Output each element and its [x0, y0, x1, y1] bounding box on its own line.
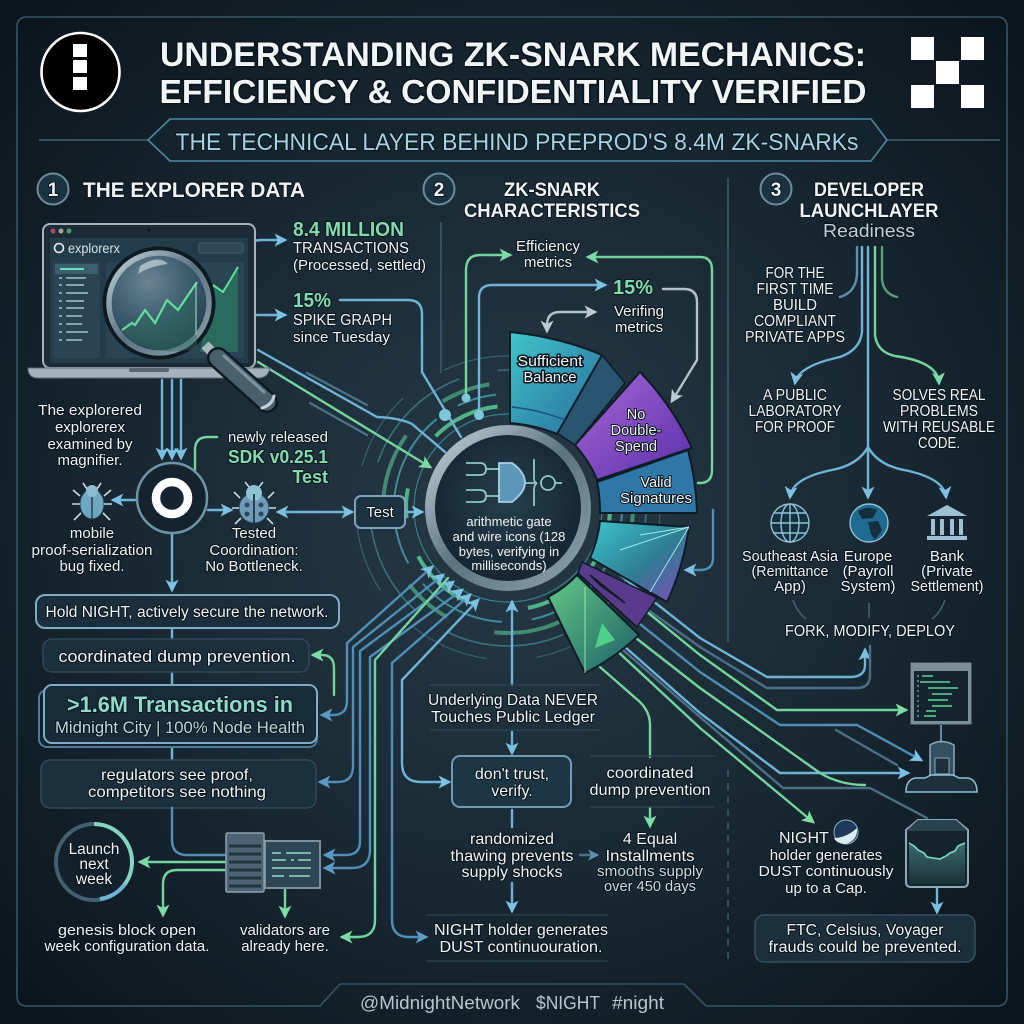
- icon: moon: [834, 820, 858, 844]
- efficiency and verifying arrows: [439, 255, 712, 483]
- panel: regulators: [41, 760, 316, 808]
- text: night holder dust: NIGHT: [779, 830, 829, 847]
- core circle with gate: and wire icons (128: [453, 529, 565, 544]
- logo: right checker: [911, 37, 984, 108]
- stat: 15% spike: since Tuesday: [293, 329, 391, 346]
- stat: 8.4 million: [293, 219, 426, 274]
- stat: 15% spike: [293, 290, 392, 346]
- wedge: sufficient balance: [510, 332, 602, 434]
- text: randomized thawing: [450, 831, 574, 881]
- heading: section 3: DEVELOPER: [814, 180, 924, 201]
- text: validators: [240, 922, 330, 955]
- heading: section 1: [38, 174, 305, 204]
- text: southeast asia: (Remittance: [752, 563, 828, 580]
- panel: coordinated dump prevention: [43, 639, 309, 672]
- text: equal installments: [597, 831, 704, 895]
- concentric rings around core: [356, 356, 660, 660]
- text: SDK note: Test: [292, 467, 328, 487]
- text: europe: (Payroll: [843, 563, 893, 580]
- text: efficiency metrics: metrics: [524, 254, 572, 271]
- flow arrows around ring logo: [113, 500, 422, 590]
- wedge: no double-spend: Double-: [611, 423, 662, 439]
- text: magnifier note: The explorered: [38, 402, 142, 419]
- callout: frauds: frauds could be prevented.: [768, 939, 962, 956]
- text: solves real problems: [883, 387, 995, 452]
- icon: wire globe: [771, 504, 809, 542]
- connector bundle to left panels: [313, 567, 478, 937]
- text: underlying data: Touches Public Ledger: [431, 709, 596, 726]
- arrows around server: [140, 808, 285, 916]
- wedge: valid signatures: Signatures: [620, 491, 692, 507]
- text: southeast asia: Southeast Asia: [742, 548, 839, 565]
- text: southeast asia: [742, 548, 839, 595]
- text: SDK note: newly released: [228, 429, 328, 446]
- text: for the first time: PRIVATE APPS: [745, 329, 845, 346]
- heading: section 3: [760, 174, 939, 241]
- laptop explorer: [28, 224, 270, 378]
- wedge: no double-spend: Spend: [615, 439, 657, 455]
- text: for the first time: FIRST TIME: [756, 281, 834, 298]
- text: public laboratory: LABORATORY: [748, 403, 842, 420]
- text: fork modify deploy: FORK, MODIFY, DEPLOY: [785, 623, 955, 640]
- subtitle banner: THE TECHNICAL LAYER BEHIND PREPROD'S 8.4M ZK-SNARKs: [176, 129, 858, 156]
- core circle with gate: bytes, verifying in: [459, 544, 559, 559]
- text: magnifier note: [38, 402, 142, 469]
- text: night holder dust: DUST continuously: [758, 863, 894, 880]
- text: for the first time: FOR THE: [766, 265, 824, 282]
- text: randomized thawing: thawing prevents: [450, 848, 574, 865]
- panel: don't trust: verify.: [491, 783, 533, 800]
- text: bank: Settlement): [910, 578, 984, 595]
- text: bank: (Private: [921, 563, 973, 580]
- connectors between left panels: [171, 628, 173, 760]
- panel: transactions highlight: >1.6M Transactions in: [67, 692, 293, 717]
- launch countdown ring: next: [79, 856, 109, 873]
- text: public laboratory: FOR PROOF: [755, 419, 835, 436]
- heading: section 3: LAUNCHLAYER: [800, 201, 939, 222]
- text: magnifier note: explorerex: [55, 419, 126, 436]
- title: UNDERSTANDING ZK-SNARK MECHANICS:: [160, 36, 866, 74]
- text: magnifier note: examined by: [47, 436, 133, 453]
- text: validators: validators are: [240, 922, 330, 939]
- text: verifying metrics: Verifing: [614, 303, 664, 320]
- panel: hold night: Hold NIGHT, actively secure the network.: [46, 604, 328, 621]
- text: SDK note: [228, 429, 328, 487]
- text: for the first time: [745, 265, 845, 346]
- text: tested coordination: Tested: [232, 525, 276, 542]
- text: bank: Bank: [930, 548, 965, 565]
- footer hashtags: [360, 993, 664, 1013]
- icon: code window: [910, 662, 972, 725]
- text: underlying data: [428, 692, 598, 726]
- text: europe: Europe: [844, 548, 892, 565]
- icon: right bug: [232, 482, 276, 524]
- text: public laboratory: A PUBLIC: [763, 387, 827, 404]
- test box: Test: [366, 504, 395, 521]
- heading: section 2: ZK-SNARK: [504, 180, 600, 201]
- heading: section 3: Readiness: [823, 221, 915, 241]
- icon: earth globe: [850, 504, 888, 542]
- text: genesis block: genesis block open: [58, 922, 196, 939]
- panel: hold night: [36, 595, 339, 628]
- icon: bank: [927, 505, 967, 540]
- text: solves real problems: PROBLEMS: [900, 403, 978, 420]
- text: SDK note: SDK v0.25.1: [228, 447, 328, 467]
- stat: 8.4 million: (Processed, settled): [293, 257, 426, 274]
- stat: 15% spike: 15%: [293, 290, 331, 312]
- core circle with gate: [430, 430, 586, 586]
- wedge: sufficient balance: Sufficient: [518, 354, 582, 370]
- launch countdown ring: week: [75, 871, 112, 888]
- text: public laboratory: [748, 387, 842, 436]
- logo: left circle: [42, 33, 120, 111]
- heading: section 2: CHARACTERISTICS: [464, 201, 640, 222]
- text: bank: [910, 548, 984, 595]
- title: [160, 36, 867, 110]
- panel: transactions highlight: Midnight City | 100% Node Health: [55, 718, 305, 737]
- text: verifying metrics: metrics: [615, 319, 663, 336]
- launch countdown ring: [56, 824, 132, 900]
- wedge: sufficient balance: Balance: [524, 370, 576, 386]
- core circle with gate: milliseconds): [471, 558, 547, 573]
- launch countdown ring: Launch: [69, 841, 119, 858]
- icon: dust container: [906, 820, 968, 887]
- callout: frauds: FTC, Celsius, Voyager: [786, 922, 944, 939]
- text: bug fixed: proof-serialization: [32, 542, 152, 559]
- panel: regulators: competitors see nothing: [88, 784, 266, 801]
- stat: 8.4 million: 8.4 MILLION: [293, 219, 404, 241]
- text: randomized thawing: randomized: [470, 831, 554, 848]
- footer hashtags: @MidnightNetwork: [360, 993, 521, 1013]
- text: genesis block: week configuration data.: [43, 938, 210, 955]
- text: night holder dust: [758, 830, 894, 897]
- text: for the first time: COMPLIANT: [754, 313, 836, 330]
- stat: 15% spike: SPIKE GRAPH: [293, 312, 392, 329]
- wedge: no double-spend: No: [627, 407, 645, 423]
- text: verifying metrics: [614, 303, 664, 336]
- text: genesis block: [43, 922, 210, 955]
- panel: don't trust: [452, 756, 571, 807]
- text: tested coordination: No Bottleneck.: [205, 558, 303, 575]
- text: efficiency metrics: Efficiency: [516, 238, 580, 255]
- panel: regulators: regulators see proof,: [101, 767, 253, 784]
- heading: section 1: THE EXPLORER DATA: [83, 179, 305, 202]
- text: solves real problems: CODE.: [918, 435, 960, 452]
- wedge: valid signatures: Valid: [640, 475, 672, 491]
- icon: left bug: [72, 483, 112, 520]
- center bottom arrows: [427, 602, 715, 961]
- text: coordinated dump: [590, 765, 710, 799]
- text: europe: System): [840, 578, 896, 595]
- section dividers: [441, 178, 728, 962]
- icon: node robot: [906, 725, 977, 792]
- panel: transactions highlight: [39, 685, 317, 747]
- stat: 8.4 million: TRANSACTIONS: [293, 240, 409, 257]
- wedge: valid signatures: [597, 450, 697, 513]
- test box: [355, 496, 405, 528]
- subtitle banner: [39, 119, 1000, 161]
- core circle with gate: arithmetic gate: [466, 514, 552, 529]
- text: underlying data: Underlying Data NEVER: [428, 692, 598, 709]
- magnifier: [107, 251, 274, 408]
- callout: frauds: [755, 915, 975, 962]
- wedge: dark filler segments: [557, 355, 657, 627]
- heading: section 3: 3: [771, 180, 781, 201]
- icon: server and console: [226, 833, 320, 892]
- icon: arithmetic gate: [466, 459, 562, 506]
- arrow: container to callout: [936, 889, 938, 912]
- text: equal installments: Installments: [606, 848, 694, 865]
- heading: section 1: 1: [48, 180, 59, 201]
- text: solves real problems: SOLVES REAL: [892, 387, 986, 404]
- heading: section 2: [424, 174, 640, 222]
- text: bug fixed: bug fixed.: [59, 558, 125, 575]
- footer hashtags: $NIGHT: [536, 993, 600, 1013]
- text: equal installments: over 450 days: [604, 879, 696, 895]
- text: coordinated dump: dump prevention: [590, 782, 710, 799]
- long lines to right column: [600, 510, 927, 822]
- title: EFFICIENCY & CONFIDENTIALITY VERIFIED: [160, 73, 867, 110]
- panel: don't trust: don't trust,: [475, 766, 549, 783]
- ring logo node: [137, 463, 207, 533]
- wedge: green: [548, 575, 639, 673]
- text: bug fixed: [32, 525, 152, 575]
- laptop explorer: explorerx: [68, 240, 120, 256]
- text: efficiency metrics: [516, 238, 580, 271]
- text: night holder dust: holder generates: [770, 847, 882, 864]
- text: bug fixed: mobile: [70, 525, 114, 542]
- heading: section 2: 2: [434, 180, 444, 201]
- panel: night holder dust: DUST continuouration.: [440, 939, 602, 956]
- text: equal installments: 4 Equal: [623, 831, 677, 848]
- section 3 branching lines: [790, 247, 946, 619]
- text: europe: [840, 548, 896, 595]
- wedge: prism: [590, 521, 689, 602]
- text: tested coordination: [205, 525, 303, 575]
- text: magnifier note: magnifier.: [57, 452, 123, 469]
- panel: night holder dust: NIGHT holder generates: [434, 922, 608, 939]
- arrows from explorer to core: [162, 240, 461, 470]
- text: validators: already here.: [241, 938, 329, 955]
- text: for the first time: BUILD: [773, 297, 817, 314]
- stat: 15%: 15%: [613, 277, 653, 299]
- panel: coordinated dump prevention: coordinated dump prevention.: [58, 647, 296, 666]
- text: southeast asia: App): [774, 578, 806, 595]
- text: solves real problems: WITH REUSABLE: [883, 419, 995, 436]
- panel: night holder dust: [434, 922, 608, 956]
- text: night holder dust: up to a Cap.: [785, 880, 867, 897]
- text: equal installments: smooths supply: [597, 864, 704, 880]
- text: coordinated dump: coordinated: [606, 765, 694, 782]
- text: randomized thawing: supply shocks: [462, 864, 562, 881]
- wedge: no double-spend: [575, 372, 692, 480]
- footer hashtags: #night: [612, 993, 664, 1013]
- text: tested coordination: Coordination:: [209, 542, 299, 559]
